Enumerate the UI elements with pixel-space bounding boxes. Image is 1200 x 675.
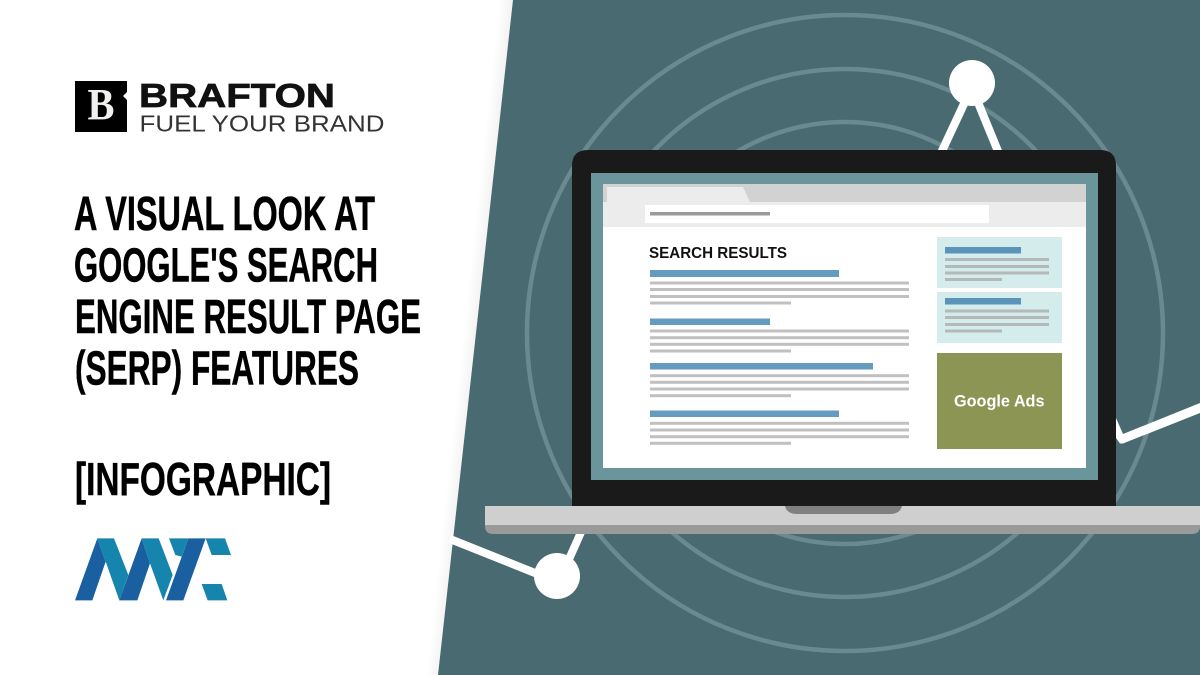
browser tab (607, 187, 750, 202)
network line: right (1116, 403, 1200, 444)
title (74, 188, 421, 396)
logo mark (75, 80, 127, 132)
logo: Brafton (75, 78, 384, 136)
tagline: FUEL YOUR BRAND (140, 110, 384, 136)
title: GOOGLE'S SEARCH (74, 240, 378, 292)
address bar (645, 205, 989, 223)
panel: teal background (438, 0, 1200, 675)
laptop base (485, 506, 1200, 534)
search result 2 (650, 318, 909, 352)
logo: MTC (75, 538, 231, 600)
title: ENGINE RESULT PAGE (75, 291, 421, 344)
logo mark: B (88, 80, 114, 129)
sidebar card 2 (937, 292, 1062, 343)
network node: bottom left (450, 530, 582, 599)
wordmark: BRAFTON (139, 78, 335, 115)
search result 1 (650, 270, 909, 304)
google ads box: Google Ads (954, 392, 1044, 410)
title: (SERP) FEATURES (75, 342, 359, 396)
sidebar card 1 (937, 237, 1062, 288)
browser page (603, 184, 1086, 468)
concentric rings (527, 15, 1163, 651)
title: A VISUAL LOOK AT (74, 188, 375, 241)
heading: search results: SEARCH RESULTS (649, 245, 787, 262)
trackpad notch (785, 506, 902, 514)
search result 4 (650, 410, 909, 445)
laptop lid (572, 150, 1116, 506)
laptop screen (591, 173, 1098, 480)
search result 3 (650, 363, 909, 397)
laptop (485, 150, 1200, 534)
google ads box (937, 353, 1062, 449)
subtitle: infographic: [INFOGRAPHIC] (75, 453, 331, 505)
network node: top (942, 60, 998, 152)
